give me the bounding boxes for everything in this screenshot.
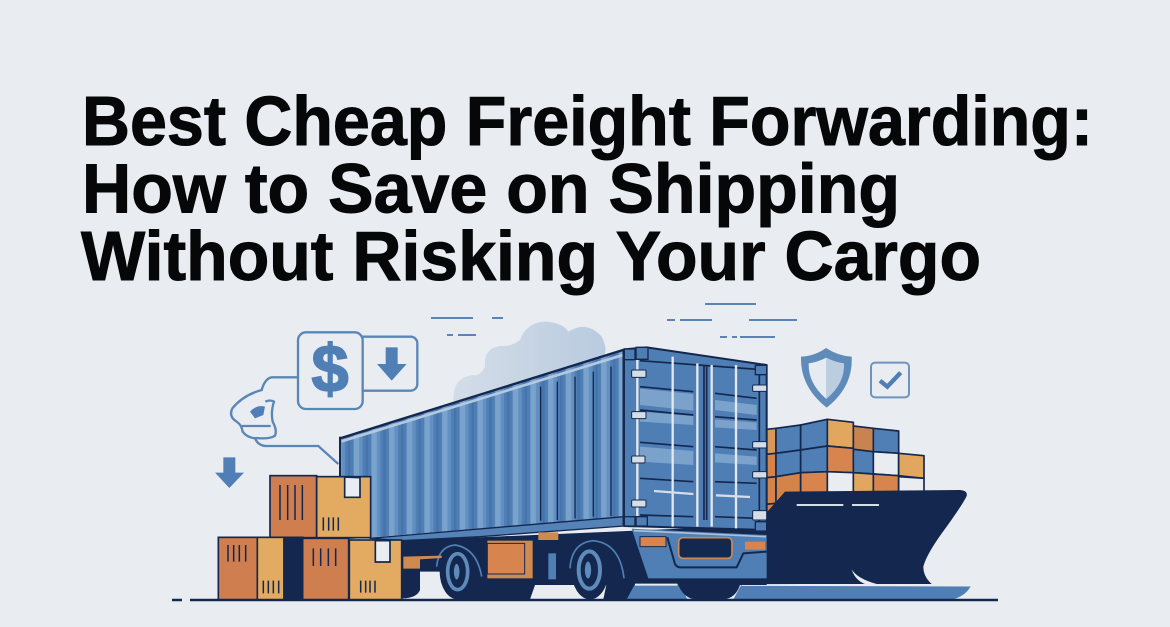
side lower rail (370, 517, 624, 541)
mud flap bracket (403, 556, 442, 569)
top right box (317, 477, 371, 538)
water band (733, 584, 971, 599)
left tail light (640, 537, 666, 547)
icon: panel down arrow (377, 347, 407, 381)
dollar panel (298, 332, 363, 409)
bottom box tape (375, 541, 390, 562)
door highlight bands (640, 389, 757, 465)
container rear face (624, 347, 767, 530)
marker light (538, 532, 558, 540)
check mark (880, 373, 901, 387)
title (81, 82, 1093, 295)
hull deck lines (797, 502, 879, 508)
door lock bars (654, 491, 750, 497)
top left box (270, 476, 317, 538)
trailer wheel rear (437, 544, 482, 600)
container left edge (337, 437, 343, 477)
chassis (402, 525, 767, 599)
stacked containers (760, 419, 924, 520)
bottom box two tan (349, 540, 402, 600)
side block (548, 553, 556, 579)
bottom box two orange (303, 538, 349, 600)
title: Best Cheap Freight Forwarding: (82, 82, 1093, 160)
door rods (637, 357, 736, 528)
down arrow panel (347, 337, 417, 391)
truck and container (337, 347, 767, 600)
rear bumper (632, 529, 767, 578)
title: How to Save on Shipping (82, 150, 900, 228)
top rail highlight (342, 355, 624, 441)
axle fill (603, 583, 640, 599)
ship hull (760, 490, 967, 584)
right tail light (745, 542, 765, 550)
grille (679, 538, 732, 558)
box handling marks (228, 485, 375, 593)
container side wall (337, 347, 627, 543)
cargo ship (733, 419, 971, 599)
icon: price tag with dollar sign and down arrow (298, 332, 417, 409)
title: Without Risking Your Cargo (81, 217, 981, 295)
bottom box one tan (257, 537, 284, 600)
icon: left down arrow (215, 457, 244, 488)
corner castings (624, 347, 767, 531)
page canvas (80, 94, 1088, 602)
check box (871, 363, 909, 397)
icon: dollar sign: $ (311, 332, 349, 406)
rear wheel (677, 583, 741, 599)
bumper recess line (667, 537, 767, 567)
hull bow wave (852, 569, 877, 584)
top box tape (345, 477, 360, 497)
bumper top highlight (634, 531, 766, 537)
door hinges (632, 370, 767, 520)
side orange panel (487, 541, 533, 578)
trailer wheel front (570, 541, 624, 599)
ground line (172, 599, 998, 601)
icon: shield and check box (801, 348, 909, 408)
dark gap (284, 537, 303, 600)
water highlight (742, 582, 970, 588)
road strips (627, 584, 687, 599)
motion dashes (431, 304, 797, 337)
icon: hand and connector line (231, 377, 338, 464)
container top rail (340, 349, 625, 438)
cardboard boxes (218, 476, 402, 600)
cloud (453, 322, 605, 402)
door panel lines (623, 350, 767, 527)
road strip highlight (635, 582, 677, 588)
bottom box one orange (218, 537, 257, 600)
